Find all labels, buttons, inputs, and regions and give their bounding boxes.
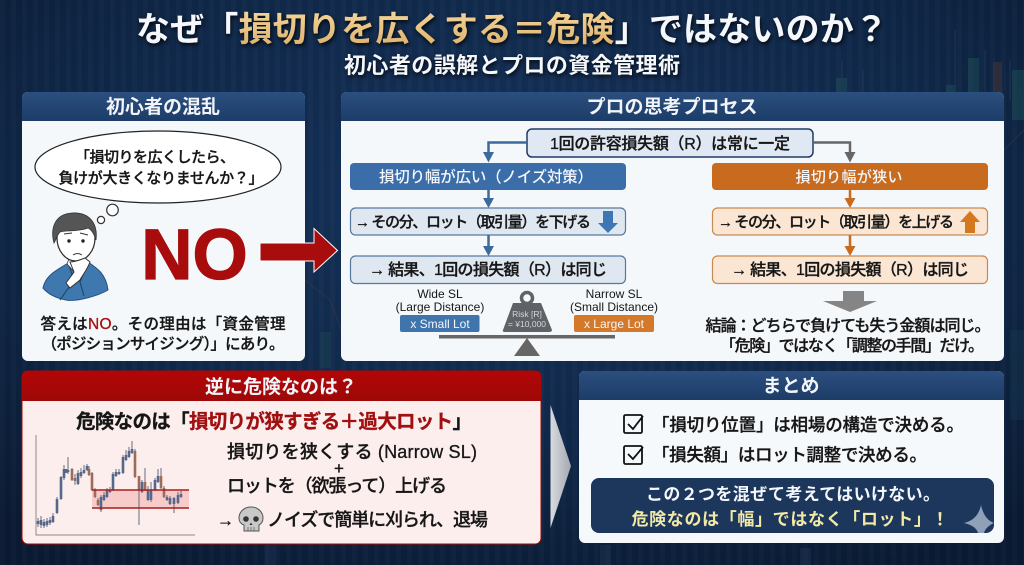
icon: up arrow [960, 211, 980, 233]
icon: worried person [43, 213, 108, 300]
narrow label: (Small Distance) [570, 300, 658, 314]
consequence text: ノイズで簡単に刈られ、退場 [267, 509, 488, 530]
speech bubble [35, 131, 281, 203]
consequence text [217, 507, 488, 531]
conclusion text [706, 317, 990, 355]
narrow header [712, 163, 988, 190]
speech bubble: 「損切りを広くしたら、 [75, 149, 235, 166]
heading: summary: まとめ [762, 376, 820, 397]
wide stop column [350, 163, 626, 284]
raise lot box [712, 208, 988, 235]
reason text: ロットを（欲張って）上げる [227, 476, 447, 496]
reason text [227, 442, 477, 496]
beam and pivot [439, 335, 615, 356]
icon: checkbox 2 [624, 446, 643, 464]
same loss box: → 結果、1回の損失額（R）は同じ [731, 261, 969, 279]
narrow stop column [712, 163, 988, 284]
icon: sparkle [964, 505, 994, 533]
arrow: chevron to summary [550, 405, 571, 528]
wide header [350, 163, 626, 190]
raise lot box: → その分、ロット（取引量）を上げる [718, 214, 954, 231]
panel: actually dangerous [22, 371, 541, 544]
arrow: conclusion [823, 291, 877, 312]
heading: pro thinking process: プロの思考プロセス [586, 96, 758, 118]
narrow label: Narrow SL [586, 287, 643, 301]
top rule box: 1回の許容損失額（R）は常に一定 [550, 135, 790, 153]
same loss box [350, 256, 626, 284]
wide label: x Small Lot [410, 317, 470, 331]
conclusion text: 結論：どちらで負けても失う金額は同じ。 [706, 317, 990, 335]
answer text: 答えはNO。その理由は「資金管理 [40, 314, 286, 333]
speech bubble: 負けが大きくなりませんか？」 [58, 169, 264, 187]
arrow [844, 235, 856, 256]
consequence text: → [217, 511, 234, 530]
balance scale [396, 287, 658, 356]
lower lot box: → その分、ロット（取引量）を下げる [355, 214, 591, 231]
arrow [844, 190, 856, 208]
narrow header: 損切り幅が狭い [796, 168, 902, 186]
arrow: to narrow branch [813, 142, 856, 162]
arrow [483, 235, 494, 256]
callout [591, 478, 994, 533]
checklist item 2: 「損失額」はロット調整で決める。 [652, 445, 927, 465]
narrow label: x Large Lot [584, 317, 645, 331]
wide header: 損切り幅が広い（ノイズ対策） [379, 167, 593, 186]
reason text: 損切りを狭くする (Narrow SL) [227, 442, 477, 462]
arrow: NO to process [260, 228, 338, 272]
callout: 危険なのは「幅」ではなく「ロット」！ [632, 510, 948, 529]
checklist item 1: 「損切り位置」は相場の構造で決める。 [652, 415, 964, 435]
subtitle: 初心者の誤解とプロの資金管理術 [344, 53, 680, 78]
panel: beginner's confusion [22, 92, 305, 361]
heading: beginner's confusion: 初心者の混乱 [106, 96, 220, 118]
wide label: (Large Distance) [396, 300, 484, 314]
weight: Risk [R] [512, 309, 542, 319]
icon: skull [239, 507, 263, 531]
panel: pro thinking process [341, 92, 1004, 361]
big NO: NO [141, 216, 248, 295]
answer text: （ポジションサイジング）」にあり。 [42, 335, 284, 353]
arrow [483, 190, 494, 208]
icon: checkbox 1 [624, 415, 643, 433]
reason text: + [334, 459, 344, 478]
wide label: Wide SL [417, 287, 463, 301]
same loss box: → 結果、1回の損失額（R）は同じ [369, 261, 607, 279]
arrow: to wide branch [483, 142, 527, 162]
lower lot box [350, 208, 626, 235]
candlestick chart [36, 435, 195, 535]
same loss box [712, 256, 988, 284]
weight: = ¥10,000 [508, 319, 546, 329]
heading: actually dangerous: 逆に危険なのは？ [205, 375, 357, 398]
weight [503, 292, 552, 332]
icon: down arrow [598, 211, 618, 233]
conclusion text: 「危険」ではなく「調整の手間」だけ。 [720, 337, 984, 355]
answer text [40, 314, 286, 353]
callout: この２つを混ぜて考えてはいけない。 [646, 485, 940, 504]
top rule box [527, 129, 813, 157]
title: なぜ「損切りを広くする＝危険」ではないのか？ [136, 11, 888, 49]
panel: summary [579, 371, 1004, 543]
icon: thought bubbles [97, 204, 118, 224]
danger statement: 危険なのは「損切りが狭すぎる＋過大ロット」 [76, 410, 472, 433]
narrow label [570, 287, 658, 332]
wide label [396, 287, 484, 332]
